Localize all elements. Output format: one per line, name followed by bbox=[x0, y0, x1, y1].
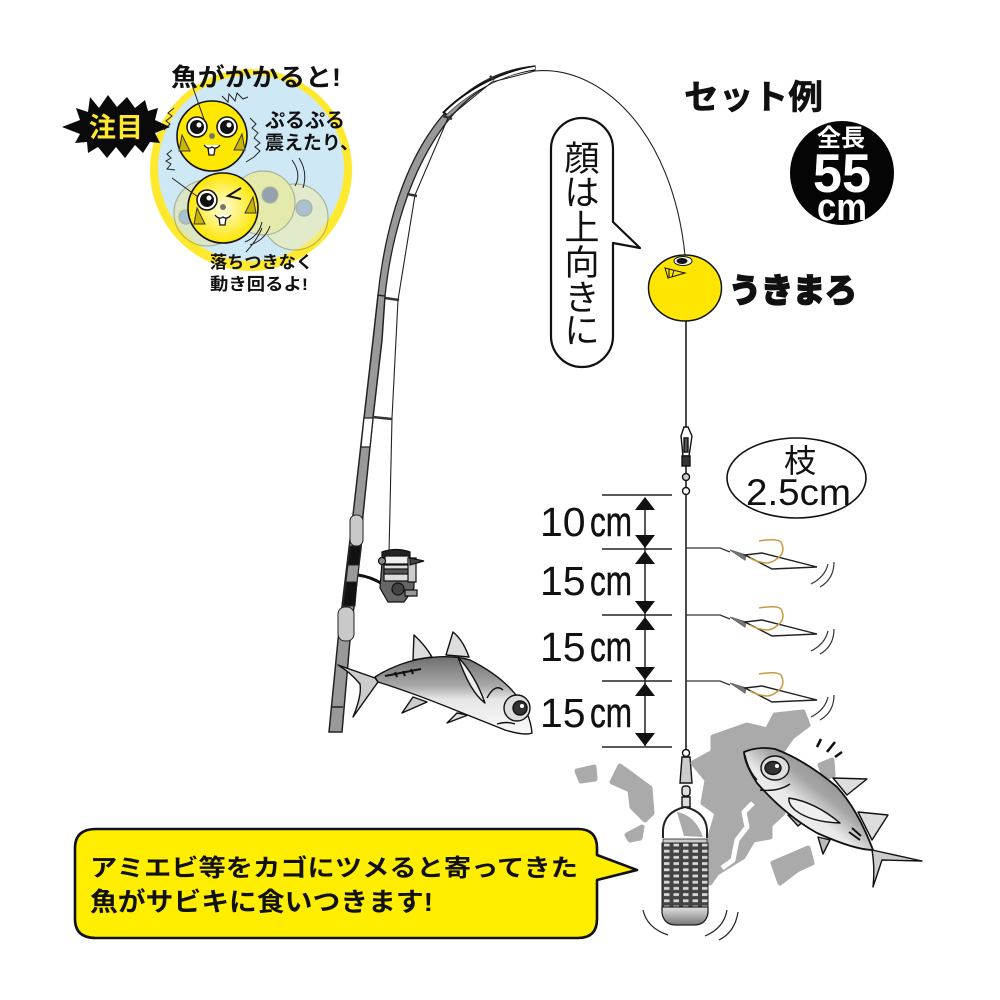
text: trembling: ぷるぷる bbox=[265, 110, 345, 132]
badge: total length 55 cm: 全長 bbox=[817, 125, 865, 152]
speech bubble: face points upward: 顔は上向きに bbox=[564, 140, 600, 351]
length 10 cm bbox=[540, 498, 632, 545]
spinning reel bbox=[358, 550, 424, 602]
sabiki hook: middle bbox=[686, 607, 834, 654]
fishing line through guides bbox=[389, 71, 685, 553]
face: trembling bbox=[177, 101, 247, 171]
chum cloud bbox=[577, 712, 833, 883]
chum cage sinker bbox=[662, 807, 708, 925]
length 15 cm upper: cm bbox=[590, 557, 632, 604]
text: restless: 落ちつきなく bbox=[210, 253, 313, 272]
length 15 cm middle bbox=[540, 623, 632, 670]
label: branch line 2.5 cm: 2.5cm bbox=[746, 472, 851, 513]
float: ukimaro bbox=[648, 255, 722, 321]
rod grip and reel seat bbox=[331, 515, 363, 707]
illustration: horse mackerel lower left bbox=[338, 632, 532, 734]
rod blank lower bbox=[329, 295, 385, 732]
sabiki hook: upper bbox=[686, 540, 834, 587]
badge: total length 55 cm: 55 bbox=[813, 142, 871, 204]
top swivel bbox=[681, 427, 692, 494]
length 15 cm lower: cm bbox=[590, 689, 632, 736]
main line and swivels bbox=[680, 321, 692, 807]
rod joint bbox=[361, 418, 373, 447]
measurement scale bbox=[540, 495, 672, 747]
face: winking and moving bbox=[188, 173, 258, 243]
length 10 cm: cm bbox=[590, 498, 632, 545]
length 15 cm middle: cm bbox=[590, 623, 632, 670]
text: shakes: 震えたり、 bbox=[265, 132, 359, 154]
rod blank upper arc bbox=[378, 66, 535, 296]
length 15 cm middle: 15 bbox=[540, 624, 586, 670]
motion arcs around sinker bbox=[643, 910, 738, 940]
yellow and blue backdrop circle bbox=[150, 69, 352, 271]
text: moves around: 動き回るよ! bbox=[210, 275, 308, 294]
heading: example setup: セット例 bbox=[684, 79, 823, 117]
surprise marks bbox=[817, 739, 842, 757]
label: branch line 2.5 cm: 枝 bbox=[784, 443, 816, 479]
callout: bait instruction bbox=[75, 829, 637, 938]
label: branch line 2.5 cm bbox=[727, 438, 866, 518]
fishing rod bbox=[329, 66, 685, 732]
badge: attention burst bbox=[62, 95, 170, 158]
callout: bait instruction: 魚がサビキに食いつきます! bbox=[90, 887, 433, 917]
length 15 cm upper: 15 bbox=[540, 558, 586, 604]
length 15 cm upper bbox=[540, 557, 632, 604]
pointer lines and motion marks bbox=[164, 85, 305, 252]
length 15 cm lower: 15 bbox=[540, 690, 586, 736]
badge: attention burst: 注目 bbox=[89, 113, 143, 143]
bottom swivel bbox=[680, 750, 692, 807]
heading: when the fish bites: 魚がかかると! bbox=[171, 63, 341, 92]
panel: notice circle with face illustrations bbox=[150, 63, 359, 294]
illustration: horse mackerel lower right bbox=[744, 748, 922, 887]
white rod tip bbox=[444, 68, 535, 114]
speech bubble: face points upward bbox=[551, 118, 640, 367]
rod guides bbox=[373, 76, 494, 419]
length 10 cm: 10 bbox=[540, 499, 586, 545]
badge: total length 55 cm: cm bbox=[817, 187, 867, 229]
length 15 cm lower bbox=[540, 689, 632, 736]
label: ukimaro: うきまろ bbox=[729, 272, 857, 309]
arrowheads bbox=[635, 497, 655, 746]
callout: bait instruction: アミエビ等をカゴにツメると寄ってきた bbox=[90, 854, 578, 882]
ghost faces showing movement bbox=[174, 171, 328, 250]
badge: total length 55 cm bbox=[790, 121, 894, 229]
sabiki hook: lower bbox=[686, 673, 834, 720]
